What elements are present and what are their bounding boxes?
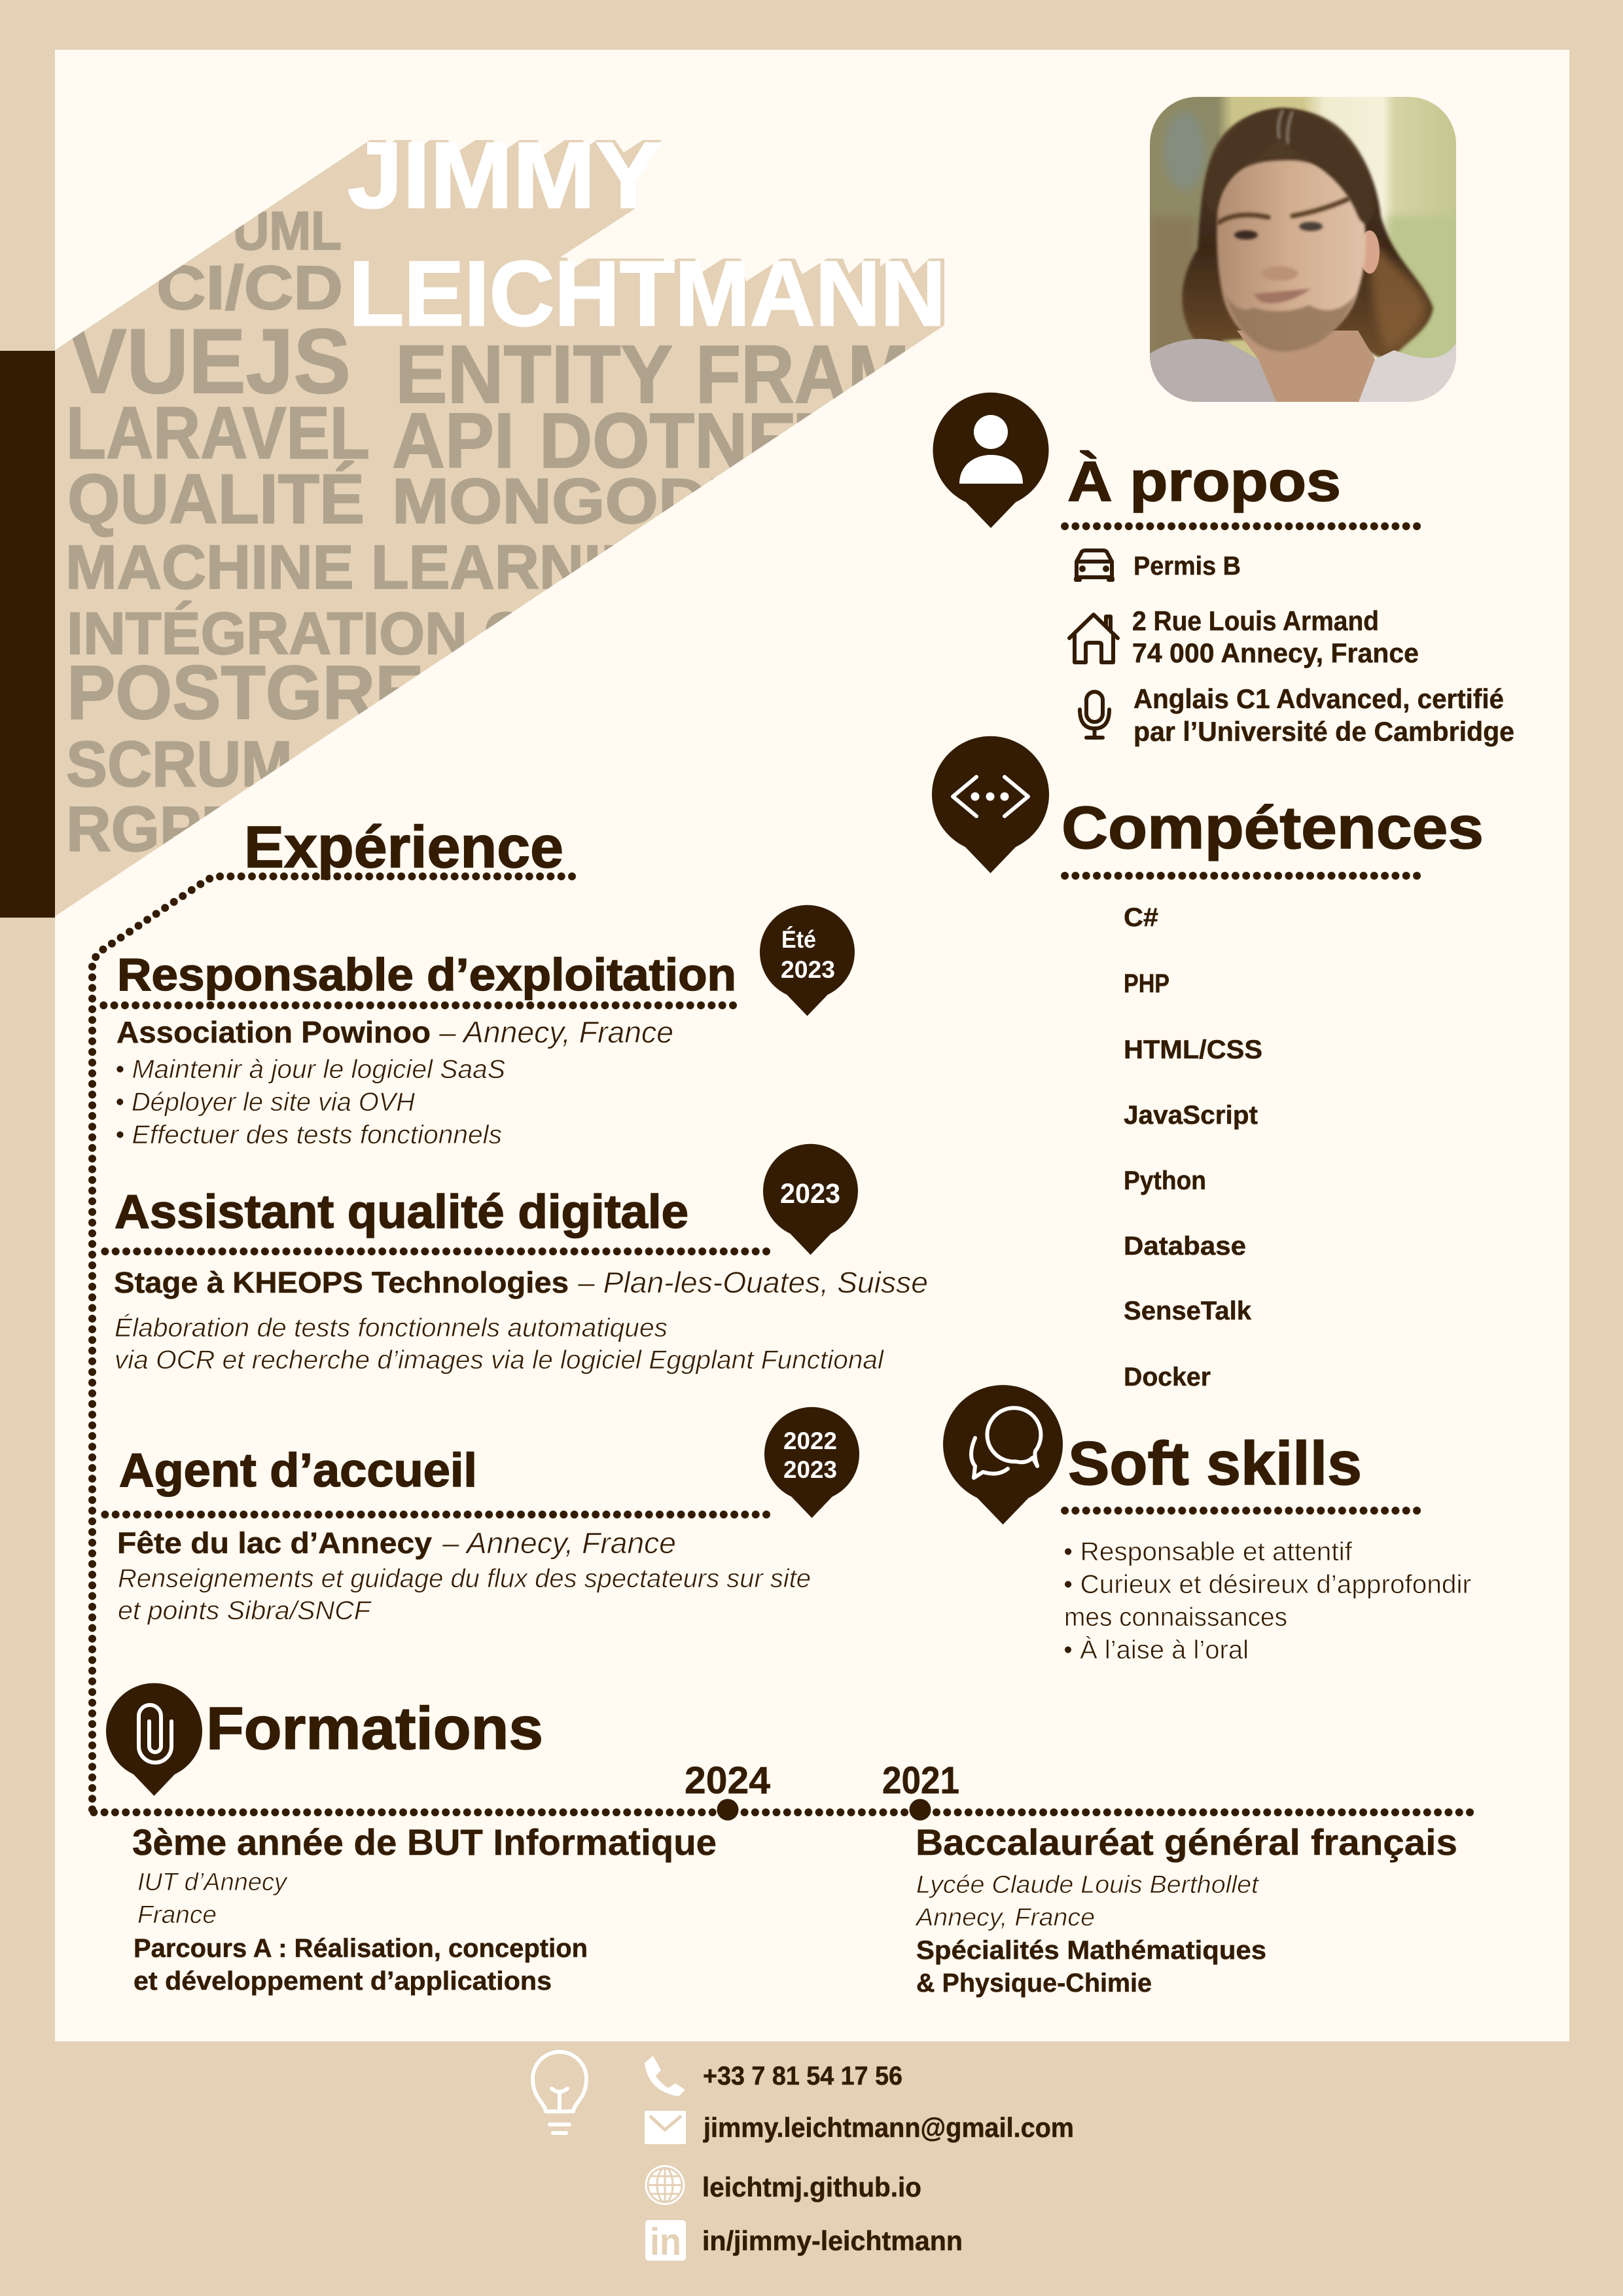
divider dots [1063, 522, 1417, 530]
panel: compétences [932, 736, 1484, 1391]
skills list: Docker [1124, 1363, 1211, 1391]
entry: agent d'accueil: Agent d’accueil [119, 1444, 477, 1497]
keyword cloud [67, 211, 914, 852]
keyword cloud: ENTITY [395, 329, 673, 420]
skills list: Database [1124, 1232, 1246, 1261]
keyword cloud: DOTNET [539, 397, 842, 484]
portrait photo [1150, 97, 1459, 402]
timeline dotted baseline [92, 1808, 1470, 1816]
divider dots [1063, 872, 1417, 880]
skills list: HTML/CSS [1124, 1035, 1262, 1064]
skills list: C# [1124, 903, 1158, 932]
date pin: 2022 2023: 2022 [783, 1427, 837, 1454]
keyword cloud: QUALITÉ [67, 459, 365, 538]
date pin: 2022 2023: 2023 [783, 1456, 837, 1483]
keyword cloud: CI/CD [156, 253, 343, 323]
language text: Anglais C1 Advanced, certifié [1133, 683, 1504, 714]
keyword cloud: INTÉGRATION CONTINUE [67, 601, 791, 667]
entry: agent d'accueil: Renseignements et guidage du flux des spectateurs sur site [118, 1564, 811, 1593]
entry: BUT informatique: France [137, 1901, 217, 1929]
permit text: Permis B [1133, 552, 1241, 581]
language text [1133, 683, 1514, 747]
timeline years and markers: 2024 [685, 1759, 770, 1802]
panel: formations [106, 1683, 1457, 1998]
address text: 2 Rue Louis Armand [1132, 605, 1379, 636]
entry: assistant qualité digitale [99, 1144, 928, 1374]
keyword cloud: LARAVEL [66, 392, 370, 474]
language text: par l’Université de Cambridge [1133, 716, 1514, 747]
title: name [348, 124, 946, 345]
skills list: SenseTalk [1124, 1297, 1252, 1325]
skills list: Python [1124, 1166, 1206, 1195]
heading: Soft skills [1068, 1429, 1362, 1498]
date pin: été 2023: 2023 [781, 956, 835, 983]
entry: responsable d'exploitation: – Annecy, France [438, 1015, 673, 1049]
icon: mail [645, 2111, 686, 2144]
icon: house [1069, 615, 1118, 662]
entry: responsable d'exploitation: • Déployer le site via OVH [115, 1088, 415, 1117]
entry: BUT informatique: Parcours A : Réalisation, conception [134, 1934, 588, 1963]
entry: responsable d'exploitation [99, 905, 855, 1149]
entry: assistant qualité digitale: via OCR et recherche d’images via le logiciel Eggplant Functional [115, 1346, 884, 1374]
date pin: 2023 [763, 1144, 858, 1255]
keyword cloud: MONGODB [392, 465, 757, 537]
phone number: +33 7 81 54 17 56 [703, 2062, 902, 2090]
skills list: PHP [1124, 969, 1169, 998]
soft skills list: • Curieux et désireux d’approfondir [1063, 1570, 1471, 1599]
title: name: JIMMY [348, 124, 662, 228]
panel: expérience [92, 815, 1470, 1812]
address text: 74 000 Annecy, France [1132, 637, 1419, 668]
icon: car [1076, 550, 1113, 580]
keyword cloud: API [392, 397, 514, 484]
date pin: été 2023: Été [781, 926, 816, 953]
heading: Expérience [244, 815, 563, 880]
entry: agent d'accueil: et points Sibra/SNCF [118, 1596, 372, 1625]
entry: assistant qualité digitale: – Plan-les-Ouates, Suisse [577, 1266, 928, 1299]
entry: agent d'accueil: – Annecy, France [442, 1526, 676, 1560]
icon: microphone [1080, 692, 1109, 738]
panel: soft skills [943, 1385, 1471, 1664]
panel: contact footer [533, 2052, 1074, 2263]
website: leichtmj.github.io [702, 2172, 921, 2202]
entry: agent d'accueil: Fête du lac d’Annecy [117, 1526, 432, 1560]
entry: baccalauréat [915, 1821, 1457, 1998]
timeline dotted outline [92, 876, 572, 1812]
timeline years and markers: 2021 [882, 1759, 959, 1802]
date pin: 2022 2023 [764, 1407, 859, 1518]
entry: BUT informatique: et développement d’applications [134, 1967, 552, 1996]
entry: assistant qualité digitale: Élaboration de tests fonctionnels automatiques [115, 1313, 668, 1342]
entry: BUT informatique: IUT d’Annecy [137, 1869, 288, 1896]
keyword cloud: SCRUM [66, 728, 293, 800]
icon: person pin [933, 393, 1048, 528]
entry: baccalauréat: Annecy, France [915, 1904, 1095, 1931]
soft skills list: • À l’aise à l’oral [1063, 1635, 1249, 1664]
skills list [1124, 903, 1262, 1391]
entry: responsable d'exploitation: • Maintenir à jour le logiciel SaaS [115, 1055, 505, 1084]
icon: code pin [932, 736, 1049, 873]
entry: responsable d'exploitation: Association Powinoo [116, 1015, 431, 1049]
entry: assistant qualité digitale: Assistant qualité digitale [115, 1186, 688, 1238]
keyword cloud: POSTGRESQL [67, 650, 574, 735]
keyword cloud: MACHINE LEARNING [65, 533, 694, 602]
keyword cloud: RGPD [66, 793, 246, 865]
entry: responsable d'exploitation: • Effectuer des tests fonctionnels [115, 1121, 502, 1149]
diagonal shadow band [55, 140, 944, 916]
soft skills list: • Responsable et attentif [1063, 1537, 1353, 1566]
entry: agent d'accueil [99, 1407, 859, 1625]
date pin: 2023: 2023 [780, 1178, 840, 1210]
keyword cloud: UML [233, 200, 342, 261]
panel: à propos [933, 393, 1514, 747]
icon: globe [645, 2165, 685, 2205]
skills list: JavaScript [1124, 1101, 1258, 1130]
keyword cloud: FRAMEWORK [696, 329, 1193, 420]
email: jimmy.leichtmann@gmail.com [703, 2112, 1074, 2143]
timeline years and markers [685, 1759, 959, 1821]
date pin: été 2023 [760, 905, 855, 1016]
heading: Compétences [1061, 795, 1484, 861]
heading: À propos [1067, 450, 1341, 513]
panel: name banner with long shadow and skill words [55, 140, 944, 916]
entry: responsable d'exploitation: Responsable d’exploitation [117, 949, 736, 1000]
divider dots [1063, 1507, 1417, 1515]
icon: paperclip pin [106, 1683, 202, 1796]
heading: Formations [206, 1695, 543, 1762]
entry: baccalauréat: Spécialités Mathématiques [916, 1936, 1266, 1965]
linkedin handle: in/jimmy-leichtmann [702, 2225, 963, 2256]
address text [1132, 605, 1419, 668]
title: name: LEICHTMANN [349, 242, 946, 345]
entry: baccalauréat: Baccalauréat général français [916, 1821, 1457, 1863]
entry: BUT informatique: 3ème année de BUT Informatique [132, 1821, 717, 1863]
icon: linkedin: in [650, 2221, 681, 2263]
icon: phone [645, 2056, 685, 2096]
entry: baccalauréat: Lycée Claude Louis Berthollet [916, 1871, 1259, 1899]
icon: light bulb [533, 2052, 586, 2133]
entry: baccalauréat: & Physique-Chimie [916, 1969, 1152, 1998]
keyword cloud: VUEJS [69, 310, 351, 412]
entry: assistant qualité digitale: Stage à KHEOPS Technologies [114, 1266, 569, 1299]
soft skills list: mes connaissances [1064, 1603, 1287, 1632]
dark side bar [0, 351, 55, 918]
soft skills list [1063, 1537, 1471, 1664]
entry: BUT informatique [132, 1821, 717, 1996]
icon: chat bubbles pin [943, 1385, 1063, 1524]
